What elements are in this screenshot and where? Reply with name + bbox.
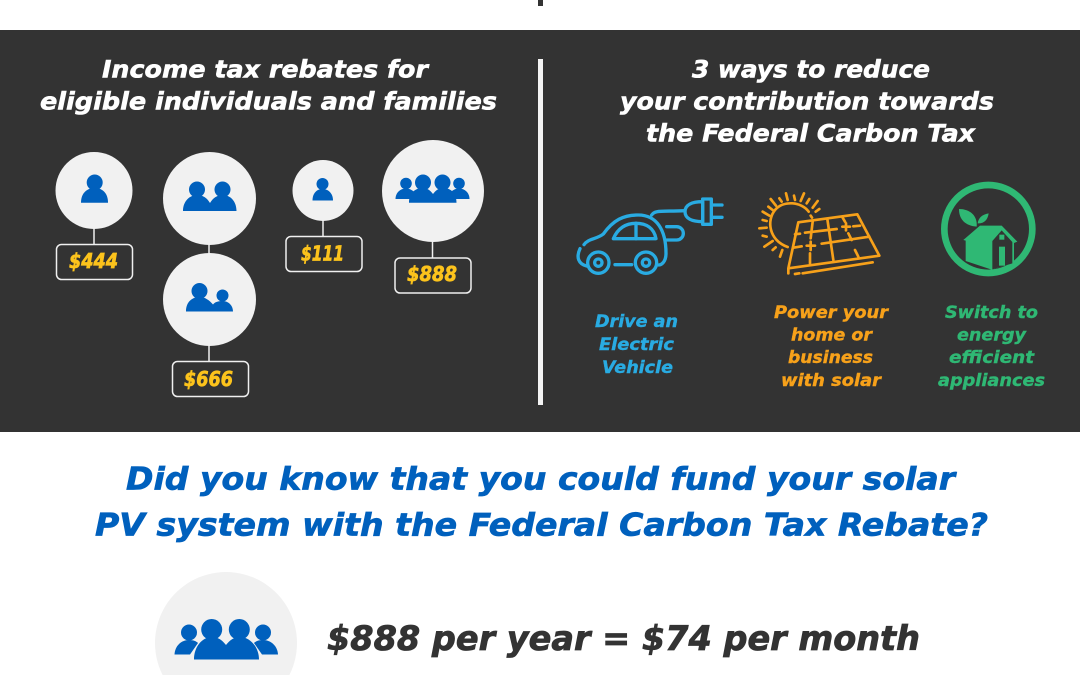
label: power with solar xyxy=(774,303,890,391)
icon: sun and solar panel xyxy=(759,193,879,274)
heading: income tax rebates: Income tax rebates for xyxy=(102,56,430,84)
rebate: single adult $444 xyxy=(56,152,132,280)
heading: three ways to reduce: the Federal Carbon Tax xyxy=(646,120,977,148)
label: power with solar: with solar xyxy=(781,371,883,391)
rebate: adult and child $666 xyxy=(163,253,256,396)
heading: did you know question: Did you know that you could fund your solar xyxy=(126,462,958,498)
heading: did you know question xyxy=(95,462,988,544)
label: drive an electric vehicle xyxy=(595,312,678,378)
heading: income tax rebates xyxy=(40,56,497,116)
label: energy efficient appliances: efficient xyxy=(949,348,1035,368)
rebate: couple xyxy=(163,152,256,254)
label: energy efficient appliances: Switch to xyxy=(945,303,1038,323)
icon: electric car with plug xyxy=(578,199,722,273)
heading: three ways to reduce: your contribution towards xyxy=(620,88,994,116)
rebate: child $111: $111 xyxy=(301,242,344,266)
label: energy efficient appliances: appliances xyxy=(938,371,1045,391)
heading: three ways to reduce: 3 ways to reduce xyxy=(692,56,930,84)
rebate: family of four $888 xyxy=(382,140,484,293)
stat: annual and monthly rebate: $888 per year = $74 per month xyxy=(327,619,920,659)
panel: dark rebates and reductions band xyxy=(0,30,1080,432)
rebate: single adult $444: $444 xyxy=(69,249,118,273)
label: energy efficient appliances xyxy=(938,303,1045,391)
icon: green house in circle xyxy=(944,185,1032,273)
top divider stub xyxy=(538,0,543,6)
label: power with solar: business xyxy=(788,348,873,368)
heading: income tax rebates: eligible individuals and families xyxy=(40,88,497,116)
label: drive an electric vehicle: Vehicle xyxy=(602,358,673,378)
label: energy efficient appliances: energy xyxy=(957,326,1027,346)
icon: family in grey circle xyxy=(155,572,297,675)
label: power with solar: home or xyxy=(791,326,874,346)
heading: did you know question: PV system with the Federal Carbon Tax Rebate? xyxy=(95,508,988,544)
rebate: family of four $888: $888 xyxy=(407,262,457,286)
label: drive an electric vehicle: Drive an xyxy=(595,312,678,332)
rebate: child $111 xyxy=(286,160,362,272)
heading: three ways to reduce xyxy=(620,56,994,148)
label: drive an electric vehicle: Electric xyxy=(599,335,674,355)
label: power with solar: Power your xyxy=(774,303,890,323)
rebate: adult and child $666: $666 xyxy=(184,367,233,391)
